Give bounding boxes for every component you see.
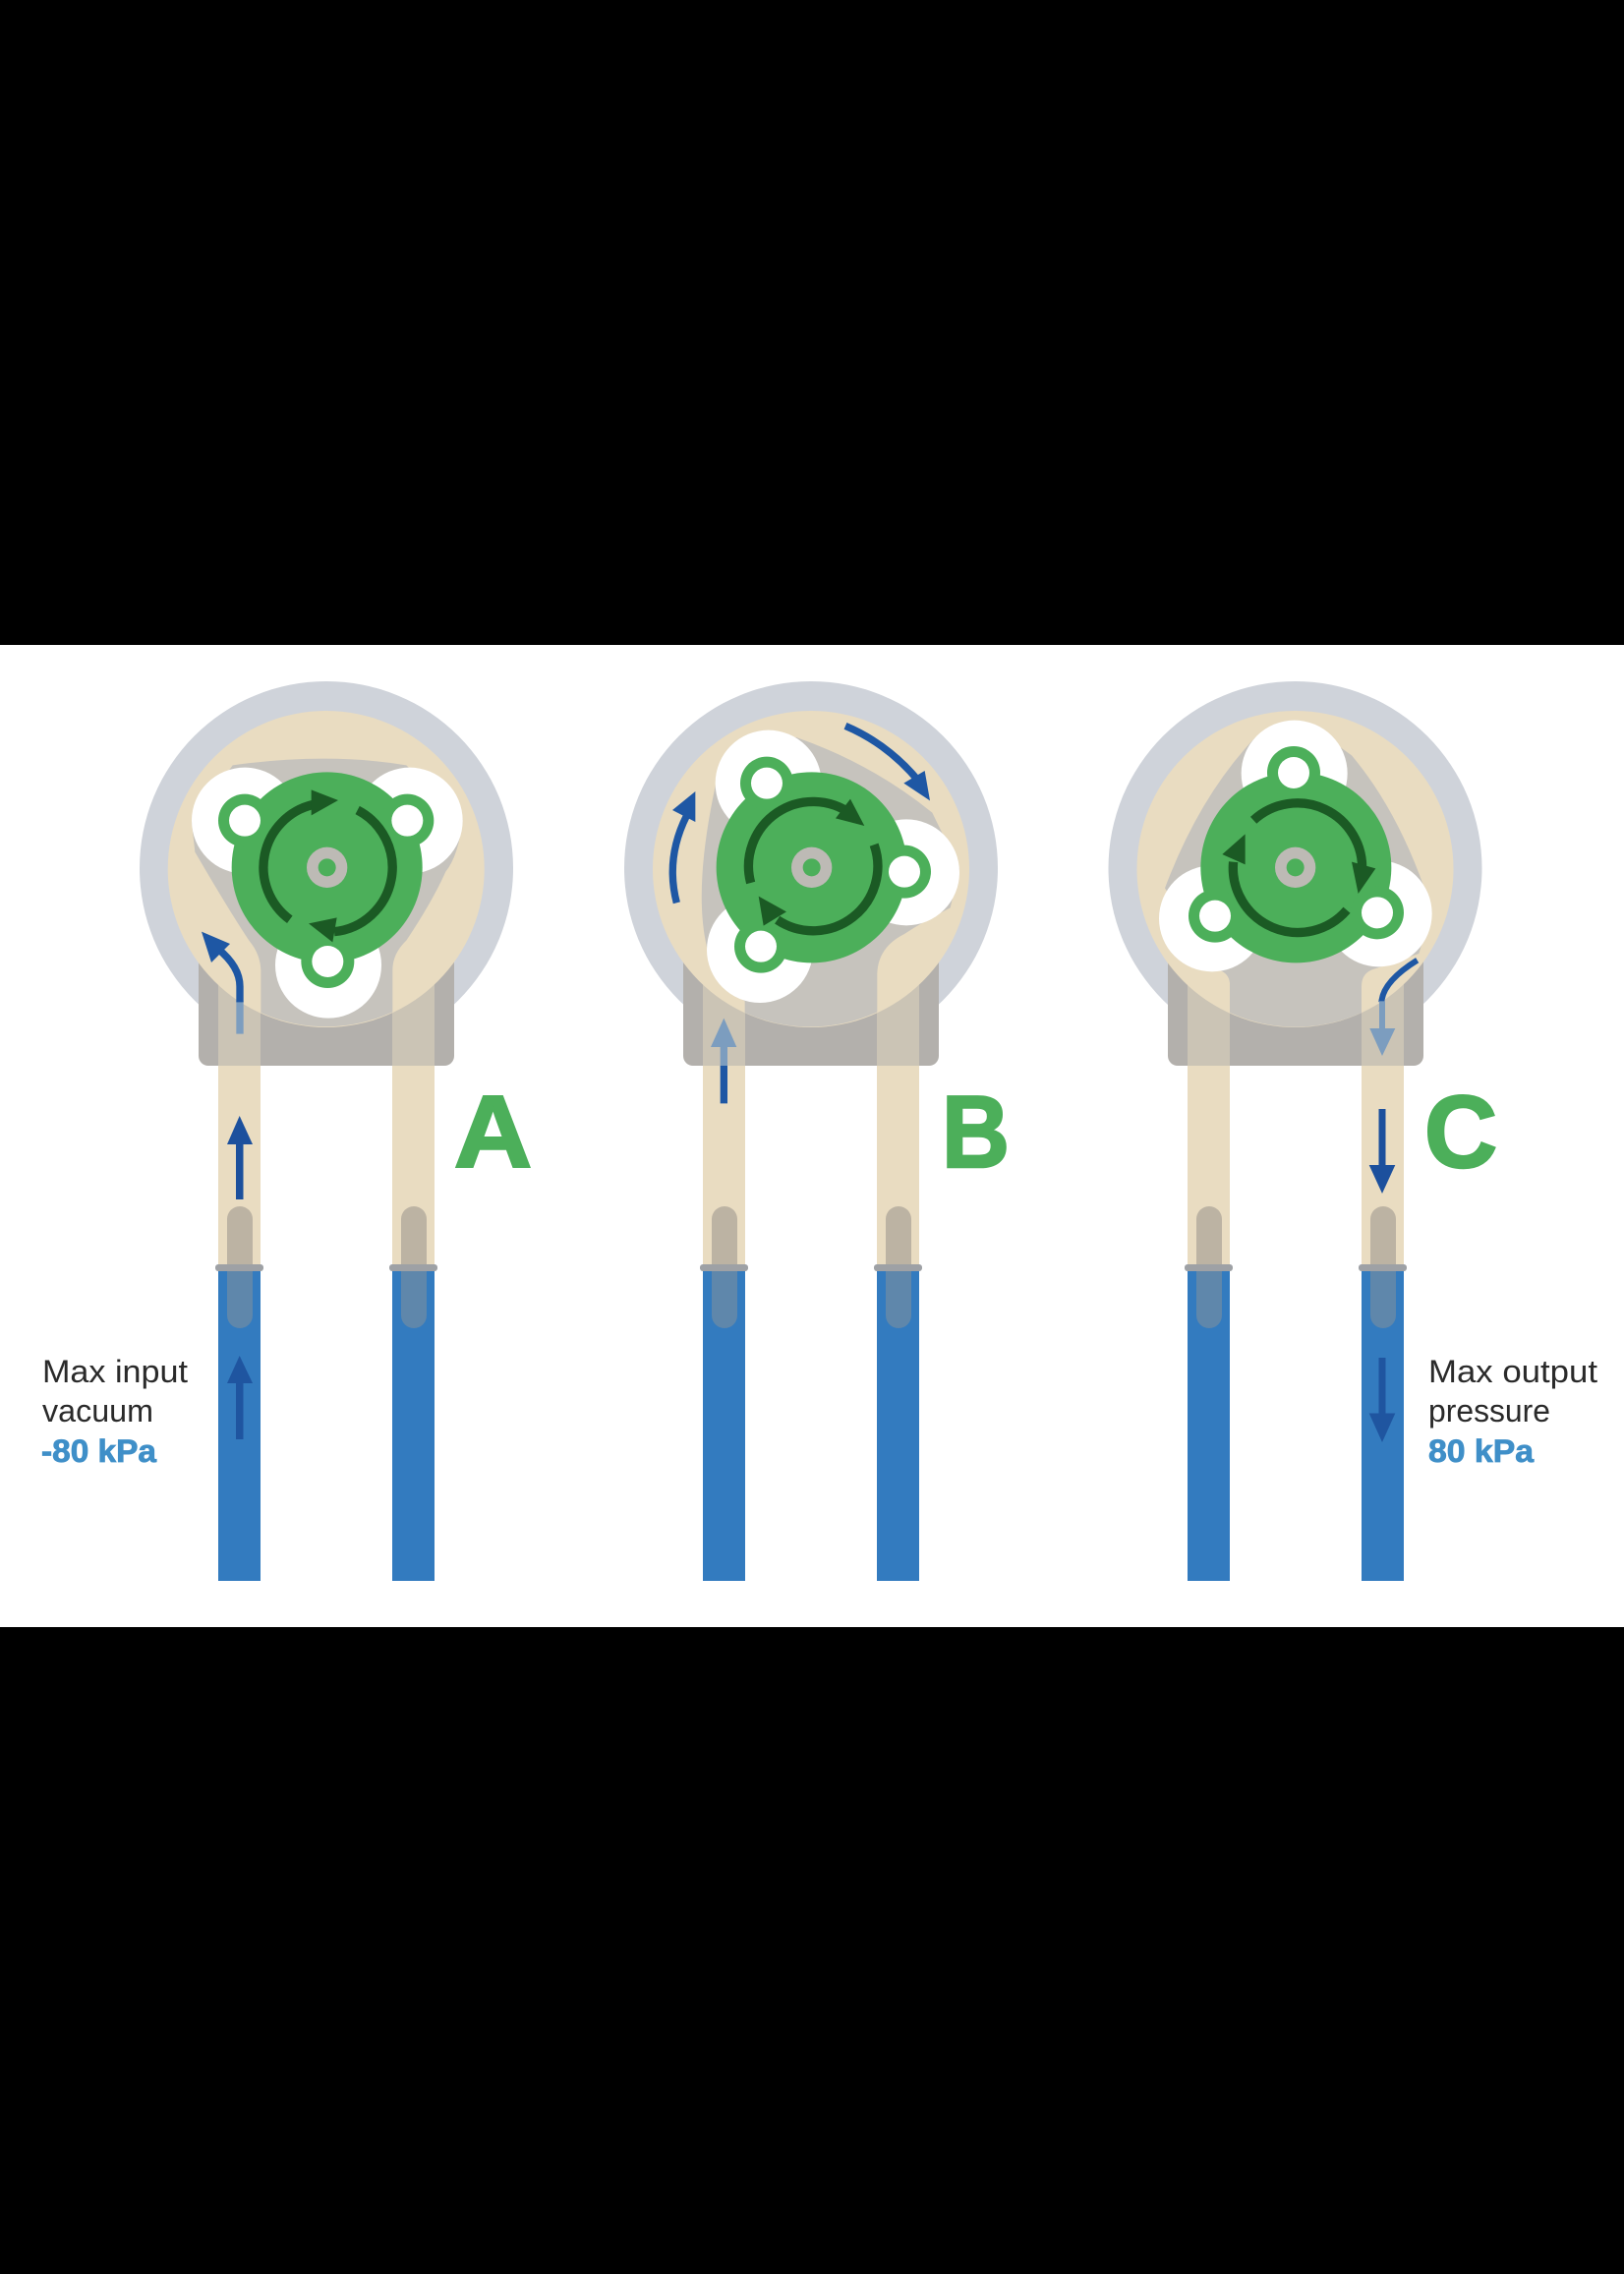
output pressure text bbox=[1428, 1354, 1597, 1469]
pump A left tube bbox=[215, 1066, 263, 1581]
pump A housing ring bbox=[140, 681, 513, 1055]
pump A rotation arrows bbox=[263, 789, 392, 942]
pump B housing ring bbox=[624, 681, 998, 1055]
pump A tube overlap on bracket bbox=[218, 959, 435, 1066]
label B: B bbox=[942, 1076, 1010, 1190]
pump A mounting bracket bbox=[199, 959, 454, 1066]
pump B tube loop bbox=[653, 711, 969, 1027]
pump C rollers bbox=[1159, 721, 1432, 971]
pump A green rotor bbox=[218, 772, 434, 988]
pump B tube overlap on bracket bbox=[703, 959, 919, 1066]
pump C rotation arrows bbox=[1222, 803, 1375, 932]
pump B rotation arrows bbox=[748, 799, 878, 931]
pump C green rotor bbox=[1189, 746, 1404, 962]
pump C roller holes bbox=[1199, 757, 1393, 932]
pump C left tube bbox=[1185, 1066, 1233, 1581]
pump B flow arrow left bbox=[672, 791, 695, 903]
pump C hub bbox=[1275, 847, 1315, 888]
pump B left tube bbox=[700, 1066, 748, 1581]
pump C tube loop bbox=[1136, 711, 1453, 1027]
pump B bbox=[624, 681, 1010, 1581]
white panel bbox=[0, 645, 1624, 1627]
pump A roller holes bbox=[229, 805, 423, 977]
pump B roller holes bbox=[745, 768, 920, 962]
pump A tube loop bbox=[168, 711, 485, 1027]
pump B right tube bbox=[874, 1066, 922, 1581]
pump B hub bbox=[791, 847, 832, 888]
pump A right tube bbox=[389, 1066, 437, 1581]
pump C outlet flow arrow bbox=[1369, 961, 1418, 1056]
pump B green rotor bbox=[717, 757, 931, 973]
pump B flow arrow top bbox=[845, 726, 930, 800]
pump C outlet arrow bbox=[1369, 1358, 1395, 1442]
pump C right tube bbox=[1359, 1066, 1407, 1581]
label C: C bbox=[1424, 1076, 1497, 1190]
pump A tube arrow bbox=[227, 1116, 253, 1199]
pump B inlet flow arrow bbox=[711, 1019, 736, 1103]
pump B rotor assembly bbox=[672, 726, 959, 1103]
pump C rotor assembly bbox=[1159, 721, 1432, 1056]
pump C bbox=[1109, 681, 1497, 1581]
input vacuum text: -80 kPa bbox=[41, 1433, 156, 1469]
pump B mounting bracket bbox=[683, 959, 939, 1066]
pump C housing ring bbox=[1109, 681, 1482, 1055]
pump A bbox=[140, 681, 532, 1581]
pump C tube arrow bbox=[1369, 1109, 1395, 1194]
input vacuum text: Max input bbox=[42, 1354, 188, 1389]
pump B rollers bbox=[707, 730, 959, 1003]
output pressure text: 80 kPa bbox=[1428, 1433, 1534, 1469]
input vacuum text: vacuum bbox=[42, 1393, 153, 1429]
output pressure text: pressure bbox=[1428, 1393, 1550, 1429]
pump C mounting bracket bbox=[1168, 959, 1423, 1066]
pump C tube overlap on bracket bbox=[1188, 959, 1404, 1066]
pump A inlet arrow bbox=[227, 1356, 253, 1439]
pump A hub bbox=[307, 847, 347, 888]
pump A track interior bbox=[192, 759, 463, 1026]
pump A flow arrow bbox=[202, 932, 240, 1034]
pump A rollers bbox=[192, 768, 463, 1019]
input vacuum text bbox=[41, 1354, 188, 1469]
label A: A bbox=[454, 1076, 532, 1190]
pump C track interior bbox=[1165, 737, 1432, 1027]
pump B track interior bbox=[702, 737, 959, 1026]
pump A rotor assembly bbox=[192, 759, 463, 1034]
output pressure text: Max output bbox=[1428, 1354, 1597, 1389]
